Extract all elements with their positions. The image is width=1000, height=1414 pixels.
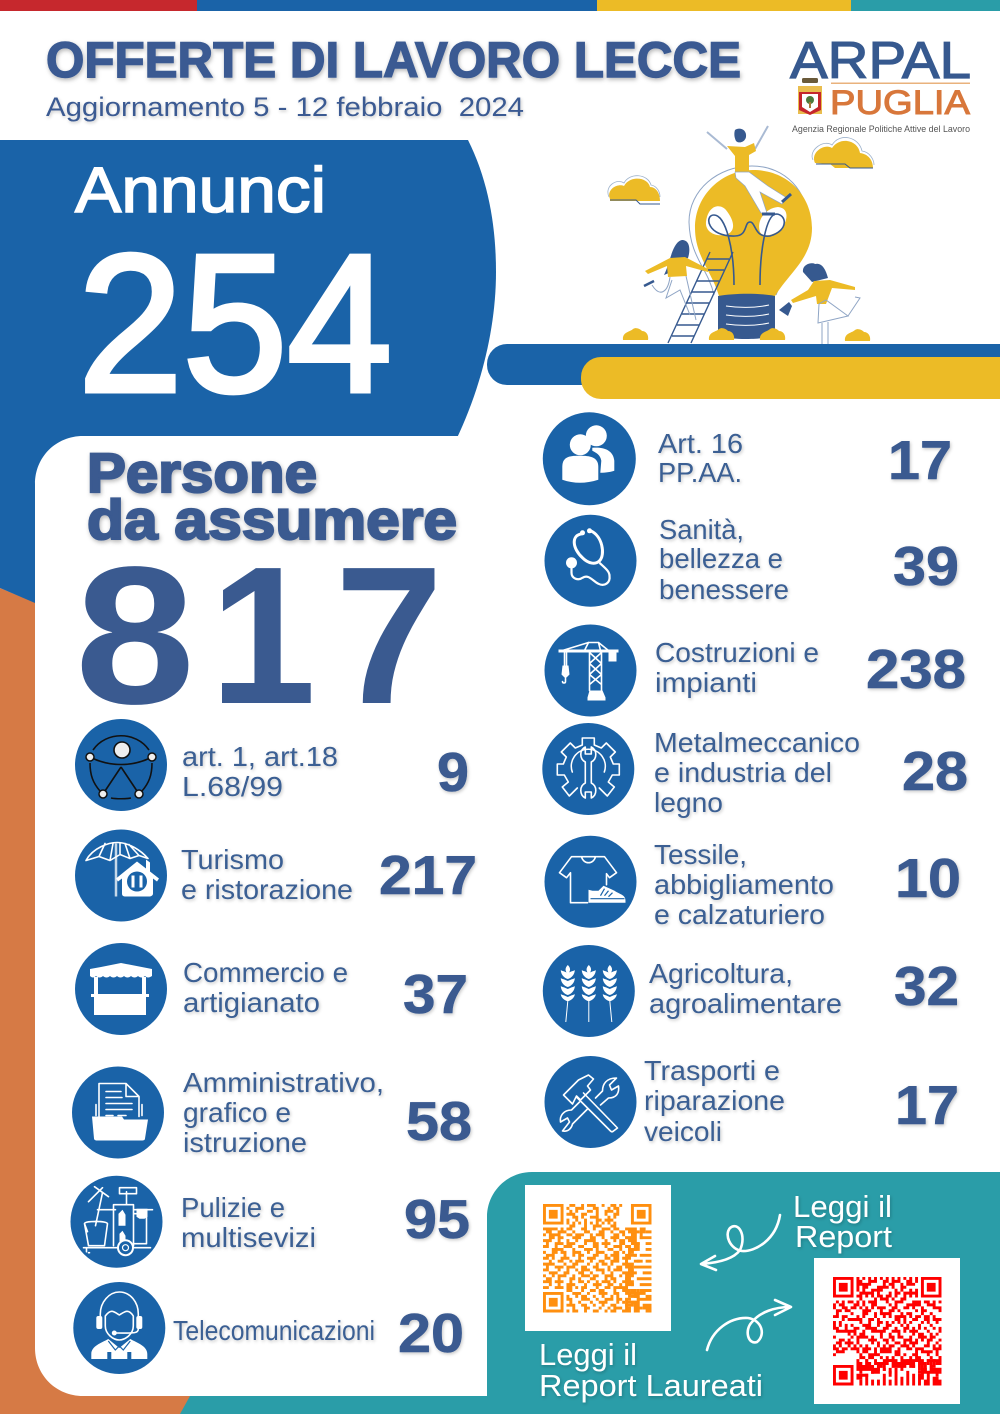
value: 20	[398, 1302, 464, 1364]
row: Telecomunicazioni	[73, 1282, 464, 1374]
value: 28	[902, 740, 968, 802]
label: Commercio e	[183, 957, 348, 988]
number: 817: 8	[75, 526, 195, 745]
title: OFFERTE DI LAVORO LECCE	[46, 32, 741, 88]
panel: teal QR panel	[180, 1172, 1000, 1414]
label: e ristorazione	[181, 874, 353, 905]
heading: Persone da assumere: Persone	[87, 441, 317, 504]
bushes	[623, 328, 870, 341]
label: art. 1, art.18	[182, 741, 338, 772]
cloud left	[608, 176, 660, 204]
panel: white content panel	[35, 436, 500, 1396]
woman on ladder	[644, 240, 708, 320]
value: 58	[406, 1090, 472, 1152]
icon: folder with document	[72, 1066, 164, 1158]
value: 32	[894, 955, 959, 1017]
background: orange side band	[0, 588, 220, 1414]
label: grafico e	[183, 1097, 291, 1128]
arrow to red QR	[707, 1300, 791, 1350]
row: Pulizie	[70, 1176, 470, 1268]
heading: Annunci: Annunci	[75, 154, 326, 226]
icon: cleaning cart	[70, 1176, 162, 1268]
heading: Persone da assumere	[87, 441, 457, 551]
number: 254: 254	[78, 214, 392, 433]
label: PP.AA.	[658, 457, 742, 488]
ladder	[668, 252, 733, 343]
label: Turismo	[181, 844, 284, 875]
row: art. 1, art.18	[75, 719, 469, 811]
icon: t-shirt and shoe	[544, 836, 636, 928]
row: Turismo	[75, 830, 477, 922]
label: Trasporti e	[644, 1055, 780, 1086]
logo: ARPAL Puglia: Agenzia Regionale Politiche Attive del Lavoro	[792, 124, 970, 135]
label: L.68/99	[182, 771, 283, 802]
label: Tessile,	[654, 839, 747, 870]
text: Leggi il Report: Report	[795, 1219, 892, 1254]
filament	[709, 214, 784, 285]
person sitting on bulb	[707, 126, 791, 214]
row: Agricoltura	[543, 945, 959, 1037]
row: Trasporti	[544, 1055, 959, 1148]
row: Commercio	[75, 943, 468, 1035]
value: 17	[895, 1074, 959, 1136]
icon: gear and wrench	[542, 723, 634, 815]
label: Sanità,	[659, 514, 744, 545]
label: bellezza e	[659, 543, 783, 574]
label: Costruzioni e	[655, 637, 819, 668]
row: Tessile	[544, 836, 961, 930]
value: 10	[895, 847, 961, 909]
icon: accessibility figure	[75, 719, 167, 811]
icon: hammer and wrench	[544, 1056, 636, 1148]
label: Telecomunicazioni	[173, 1315, 375, 1346]
icon: tower crane	[544, 624, 636, 716]
value: 39	[893, 535, 959, 597]
row: Costruzioni	[544, 624, 966, 716]
label: Metalmeccanico	[654, 727, 860, 758]
QR card: Report Laureati	[525, 1185, 671, 1331]
text: Leggi il Report Laureati: Leggi il	[539, 1337, 637, 1372]
value: 238	[866, 638, 966, 700]
value: 217	[379, 844, 477, 906]
woman with watering can	[779, 263, 860, 344]
row: Amministrativo	[72, 1066, 472, 1158]
top colour bar	[0, 0, 1000, 11]
bulb glass outline	[689, 166, 808, 295]
heading: Persone da assumere: da assumere	[87, 488, 457, 551]
icon: two people	[543, 412, 636, 505]
icon: wheat	[543, 945, 635, 1037]
text: Leggi il Report: Leggi il	[793, 1189, 892, 1224]
bulb reflections	[706, 206, 786, 235]
value: 17	[888, 429, 952, 491]
label: Amministrativo,	[183, 1067, 384, 1098]
logo: ARPAL Puglia	[790, 32, 971, 135]
label: agroalimentare	[649, 988, 842, 1019]
label: Pulizie e	[181, 1192, 285, 1223]
blue ground bar	[487, 344, 1000, 385]
label: legno	[654, 787, 723, 818]
value: 37	[403, 963, 468, 1025]
subtitle: Aggiornamento 5 - 12 febbraio 2024	[46, 92, 524, 122]
icon: operator with headset	[73, 1282, 165, 1374]
logo: ARPAL Puglia: ARPAL	[790, 32, 971, 90]
row: Metalmeccanico	[542, 723, 968, 818]
label: impianti	[655, 667, 757, 698]
label: veicoli	[644, 1116, 722, 1147]
label: abbigliamento	[654, 869, 834, 900]
label: e industria del	[654, 757, 832, 788]
QR card: Report	[814, 1258, 960, 1404]
number: 817: 1	[210, 526, 316, 745]
value: 95	[404, 1188, 470, 1250]
icon: market stall	[75, 943, 167, 1035]
label: e calzaturiero	[654, 899, 825, 930]
cloud right	[812, 137, 874, 168]
background: blue hero panel	[0, 140, 496, 618]
text: Leggi il Report Laureati: Report Laureati	[539, 1368, 763, 1403]
label: riparazione	[644, 1085, 785, 1116]
logo: ARPAL Puglia: PUGLIA	[830, 84, 970, 122]
bulb base	[718, 294, 775, 339]
illustration: light bulb with people	[608, 126, 874, 344]
label: istruzione	[183, 1127, 307, 1158]
icon: umbrella and restaurant	[75, 830, 167, 922]
icon: stethoscope	[544, 515, 636, 607]
yellow ground bar	[581, 357, 1000, 399]
row: Sanita	[544, 514, 959, 607]
icon: coat of arms	[798, 78, 822, 115]
label: Art. 16	[658, 428, 743, 459]
bulb body	[695, 170, 812, 296]
row: Art. 16	[543, 412, 952, 505]
label: Agricoltura,	[649, 958, 793, 989]
number: 817: 7	[335, 526, 443, 745]
arrow to orange QR	[701, 1215, 780, 1270]
label: multisevizi	[181, 1222, 316, 1253]
label: artigianato	[183, 987, 320, 1018]
label: benessere	[659, 574, 789, 605]
value: 9	[437, 741, 469, 803]
